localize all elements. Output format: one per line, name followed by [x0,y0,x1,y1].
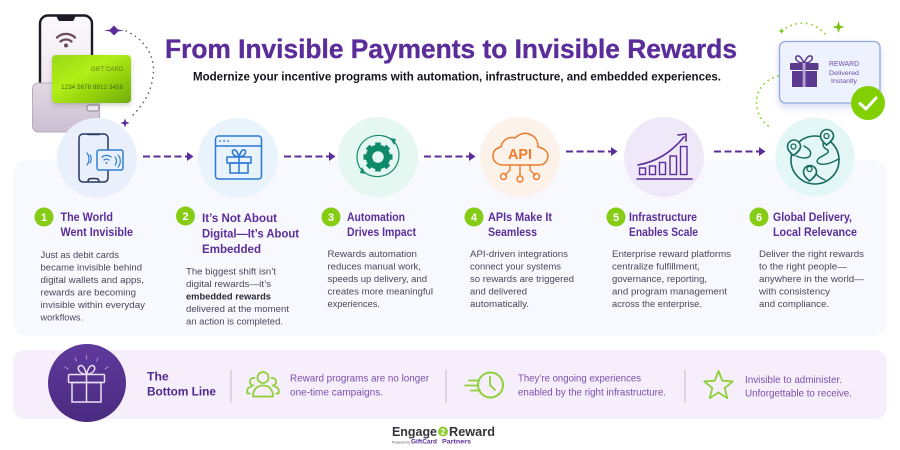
step 2: digital rewards—it’s [186,279,271,290]
step 4: API-driven integrations [470,249,568,260]
icon: fast clock [465,372,503,398]
text: reward programs [290,374,430,398]
icon circle 4: API cloud [480,117,560,197]
step 2: Digital—It’s About [202,226,299,240]
step 2 [176,206,299,328]
step 3: 3 [328,212,334,224]
step 2: 2 [182,211,189,223]
logo: Engage2Reward: GiftCard [411,440,437,446]
heading: the bottom line: Bottom Line [147,384,216,398]
decoration: dotted arc with sparkles [104,26,154,128]
icon circle 5: growth chart [624,117,704,197]
arrow 2 to 3 [284,152,336,161]
step 4: Seamless [488,226,537,239]
step 4: and delivered [470,286,527,298]
icon circle 4: API cloud: API [508,146,532,163]
step 1: Just as debit cards [40,250,119,261]
step 6: Global Delivery, [773,211,852,224]
text: invisible to administer: Invisible to administer. [745,375,842,386]
step 4 [464,208,574,310]
icon circle 6: globe with pins [776,118,854,196]
title: From Invisible Payments to Invisible Rewards [165,34,737,64]
panel: bottom line [13,344,887,422]
badge: check mark [851,86,885,120]
icon circle 3: gear with cycle arrows [338,117,418,197]
icon circle 2: browser with gift [198,118,278,198]
illustration: phone, gift card and wallet: GIFT CARD [91,66,123,73]
heading: the bottom line: The [147,370,169,384]
text: invisible to administer: Unforgettable to receive. [745,388,852,400]
subtitle: Modernize your incentive programs with automation, infrastructure, and embedded experiences. [193,70,721,84]
icon: gift [790,56,818,87]
step 3: experiences. [328,299,380,310]
decoration: green dotted arcs with sparkles [756,21,844,127]
step 3: Automation [347,211,405,224]
step 5: Enterprise reward platforms [612,249,731,260]
card: reward delivered instantly: Instantly [831,78,858,85]
step 3: Drives Impact [347,226,416,239]
text: invisible to administer [745,375,852,400]
step 6: 6 [756,212,762,224]
card: reward delivered instantly: REWARD [829,59,860,68]
step 2: The biggest shift isn’t [186,266,276,278]
step 1: digital wallets and apps, [40,275,144,286]
step 1: rewards are becoming [40,288,136,298]
step 4: connect your systems [470,262,561,272]
card: reward delivered instantly: Delivered [829,70,859,77]
step 3 [322,208,433,310]
step 1: The World [60,211,113,224]
text: ongoing experiences: They’re ongoing experiences [518,374,641,384]
logo: Engage2Reward [392,424,495,446]
icon circle 1: phone with contactless card [57,118,137,198]
heading: the bottom line [147,370,216,398]
illustration: phone, gift card and wallet [32,16,131,132]
step 3: Rewards automation [328,249,417,260]
step 6: and compliance. [759,299,829,310]
step 4: automatically. [470,299,529,310]
step 4: so rewards are triggered [470,274,574,285]
arrow 5 to 6 [714,147,766,156]
step 5: centralize fulfillment, [612,262,700,272]
step 3: reduces manual work, [328,262,421,272]
icon: people [247,372,279,396]
step 2: an action is completed. [186,316,283,328]
arrow 4 to 5 [566,147,618,156]
panel: steps background [13,160,887,336]
step 4: APIs Make It [488,211,552,224]
step 5: and program management [612,286,727,298]
step 5: governance, reporting, [612,274,707,285]
step 1: Went Invisible [60,226,134,239]
card: reward delivered instantly [780,42,880,103]
step 5: 5 [613,212,619,224]
arrow 1 to 2 [143,152,194,161]
step 5 [606,208,731,310]
step 3: creates more meaningful [328,286,433,298]
step 6: Deliver the right rewards [759,249,864,260]
text: reward programs: one-time campaigns. [290,388,383,398]
step 5: Infrastructure [629,211,697,224]
step 1 [34,208,145,324]
illustration: phone, gift card and wallet: 1234 5678 9912 3456 [61,84,124,91]
icon: purple gift circle [48,344,126,422]
icon: star [704,371,733,398]
logo: Engage2Reward: 2 [441,428,446,436]
logo: Engage2Reward: Powered by [392,440,410,444]
logo: Engage2Reward: Partners [442,440,472,446]
step 6: anywhere in the world— [759,274,864,285]
step 6: to the right people— [759,262,847,272]
text: ongoing experiences [518,374,666,398]
logo: Engage2Reward: Engage [392,424,437,439]
text: ongoing experiences: enabled by the right infrastructure. [518,388,666,398]
step 5: across the enterprise. [612,299,702,310]
step 1: became invisible behind [40,262,142,274]
step 3: speeds up delivery, and [328,274,427,285]
step 5: Enables Scale [629,226,698,239]
step 6: with consistency [758,286,830,298]
step 1: workflows. [40,312,83,324]
step 2: It’s Not About [202,211,277,225]
step 1: invisible within everyday [40,300,145,311]
step 1: 1 [41,212,47,224]
step 6: Local Relevance [773,226,858,239]
text: reward programs: Reward programs are no longer [290,374,430,384]
step 6 [750,208,864,310]
step 4: 4 [471,212,478,224]
step 2: delivered at the moment [186,304,289,315]
step 2: Embedded [202,242,261,256]
logo: Engage2Reward: Reward [449,424,495,439]
step 2: embedded rewards [186,292,271,302]
arrow 3 to 4 [424,152,476,161]
